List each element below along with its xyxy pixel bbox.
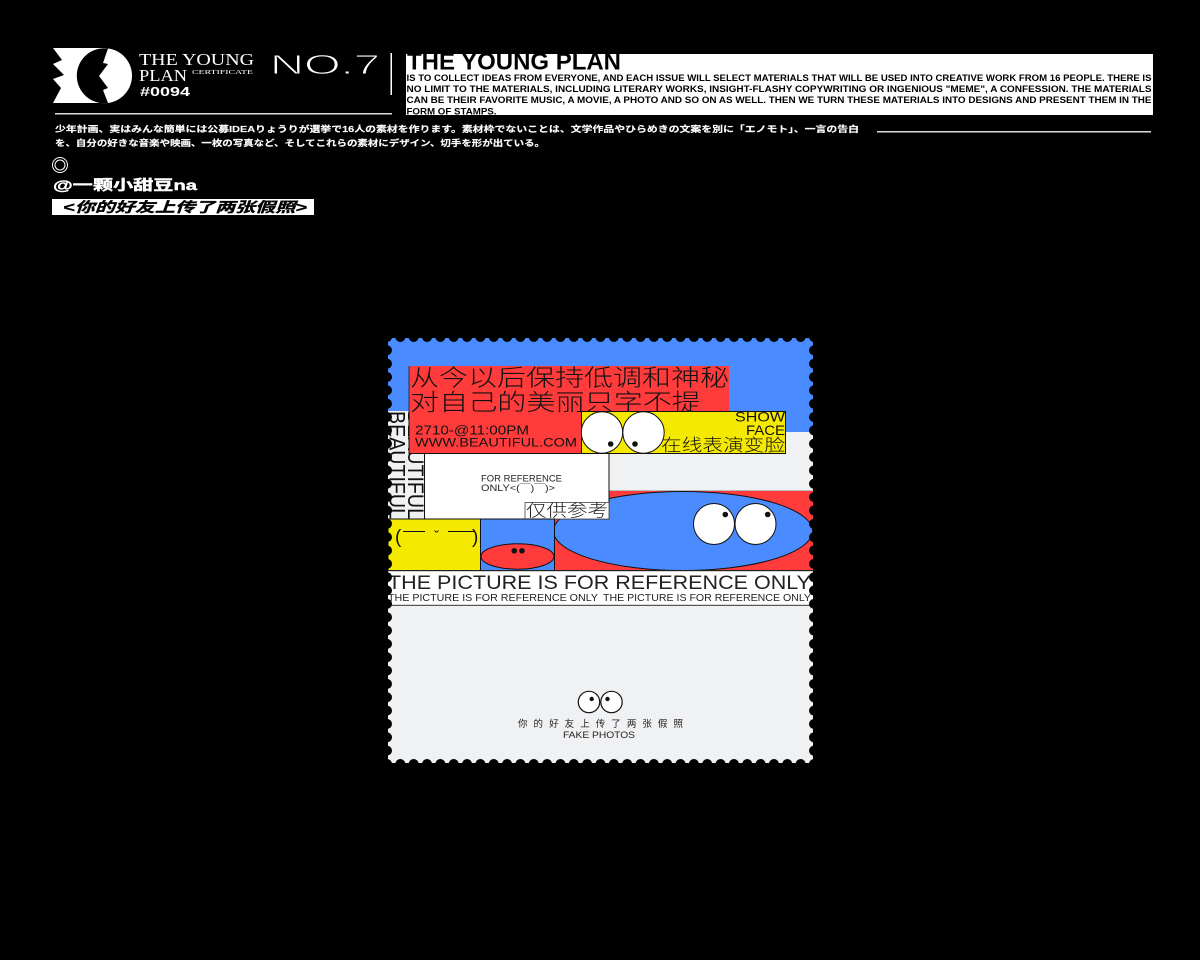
yellow show face block: SHOW [735,409,786,425]
white reference card: ONLY<(￣)￣)> [481,482,555,493]
yellow kaomoji block: ￣ [403,531,425,558]
icon: logo face [53,48,132,103]
description text: IS TO COLLECT IDEAS FROM EVERYONE, AND EACH ISSUE WILL SELECT MATERIALS THAT WILL BE USED INTO CREATIVE WORK FROM 16 PEOPLE. THERE IS [406,73,1152,83]
red headline block: WWW.BEAUTIFUL.COM [415,436,577,450]
panel: the young plan description [406,54,1153,115]
reference text strip: THE PICTURE IS FOR REFERENCE ONLY [388,592,598,604]
right rule [877,131,1151,132]
reference text strip: THE PICTURE IS FOR REFERENCE ONLY [388,572,811,594]
footer mark: FAKE PHOTOS [563,730,635,741]
yellow show face block [581,409,786,455]
red headline block: 2710-@11:00PM [415,423,529,437]
header: certificate block [53,48,392,103]
title bar [52,199,314,215]
japanese description: 少年計画、実はみんな簡単には公募IDEAりょうりが選挙で16人の素材を作ります。素材枠でないことは、文学作品やひらめきの文案を別に「エノモト」、一言の告白 [55,124,859,134]
issue number: NO.7 [270,49,380,80]
red headline block: 从今以后保持低调和神秘 [410,364,729,390]
icon: ring [52,158,68,172]
description text: FORM OF STAMPS. [406,106,496,116]
divider [390,53,392,95]
white reference card [424,454,609,520]
description text: CAN BE THEIR FAVORITE MUSIC, A MOVIE, A PHOTO AND SO ON AS WELL. THEN WE TURN THESE MATERIALS INTO DESIGNS AND PRESENT THEM IN THE [406,95,1152,105]
yellow kaomoji block: ￣ [448,531,474,558]
rotated beautiful text: BEAUTIFUL [403,411,428,519]
blue sky block [388,338,813,432]
certificate title: #0094 [140,85,190,99]
title bar: <你的好友上传了两张假照> [63,199,307,215]
white reference card: FOR REFERENCE [481,474,562,484]
description text: NO LIMIT TO THE MATERIALS, INCLUDING LITERARY WORKS, INSIGHT-FLASHY COPYWRITING OR INGENIOUS "MEME", A CONFESSION. THE MATERIALS [406,84,1152,94]
japanese description: を、自分の好きな音楽や映画、一枚の写真など、そしてこれらの素材にデザイン、切手を形が出ている。 [55,138,545,148]
description text [406,73,1152,116]
yellow show face block: FACE [746,422,785,438]
gray side strip [388,411,408,432]
yellow show face block: 在线表演变脸 [661,436,785,455]
author handle: @一颗小甜豆na [53,177,197,193]
panel: stamp [384,337,814,764]
header rule [55,113,392,114]
rotated beautiful text: BEAUTIFUL [384,411,410,519]
footer mark: 你的好友上传了两张假照 [518,718,683,730]
reference text strip: THE PICTURE IS FOR REFERENCE ONLY [603,592,811,604]
reference text strip [388,570,813,606]
icon: small eyes [578,691,622,713]
yellow kaomoji block: ˇ [434,528,439,545]
stamp background [388,432,813,763]
blue block with red ellipse [480,519,554,571]
stamp perforations [387,337,814,764]
red headline block [409,364,729,454]
eyes [581,412,664,453]
red band with blue ellipse [554,490,813,571]
certificate title: PLAN [139,66,187,85]
yellow kaomoji block: ) [472,527,478,548]
rotated beautiful text [390,412,424,518]
red headline block: 对自己的美丽只字不提 [410,389,701,415]
heading: THE YOUNG PLAN [407,48,621,76]
yellow kaomoji block [388,519,480,571]
certificate title: CERTIFICATE [192,70,254,76]
footer mark [518,691,683,741]
japanese description [55,124,859,148]
certificate title [139,50,254,99]
certificate title: THE YOUNG [139,50,254,69]
white reference card: 仅供参考 [526,502,608,520]
yellow kaomoji block: ( [395,527,402,548]
